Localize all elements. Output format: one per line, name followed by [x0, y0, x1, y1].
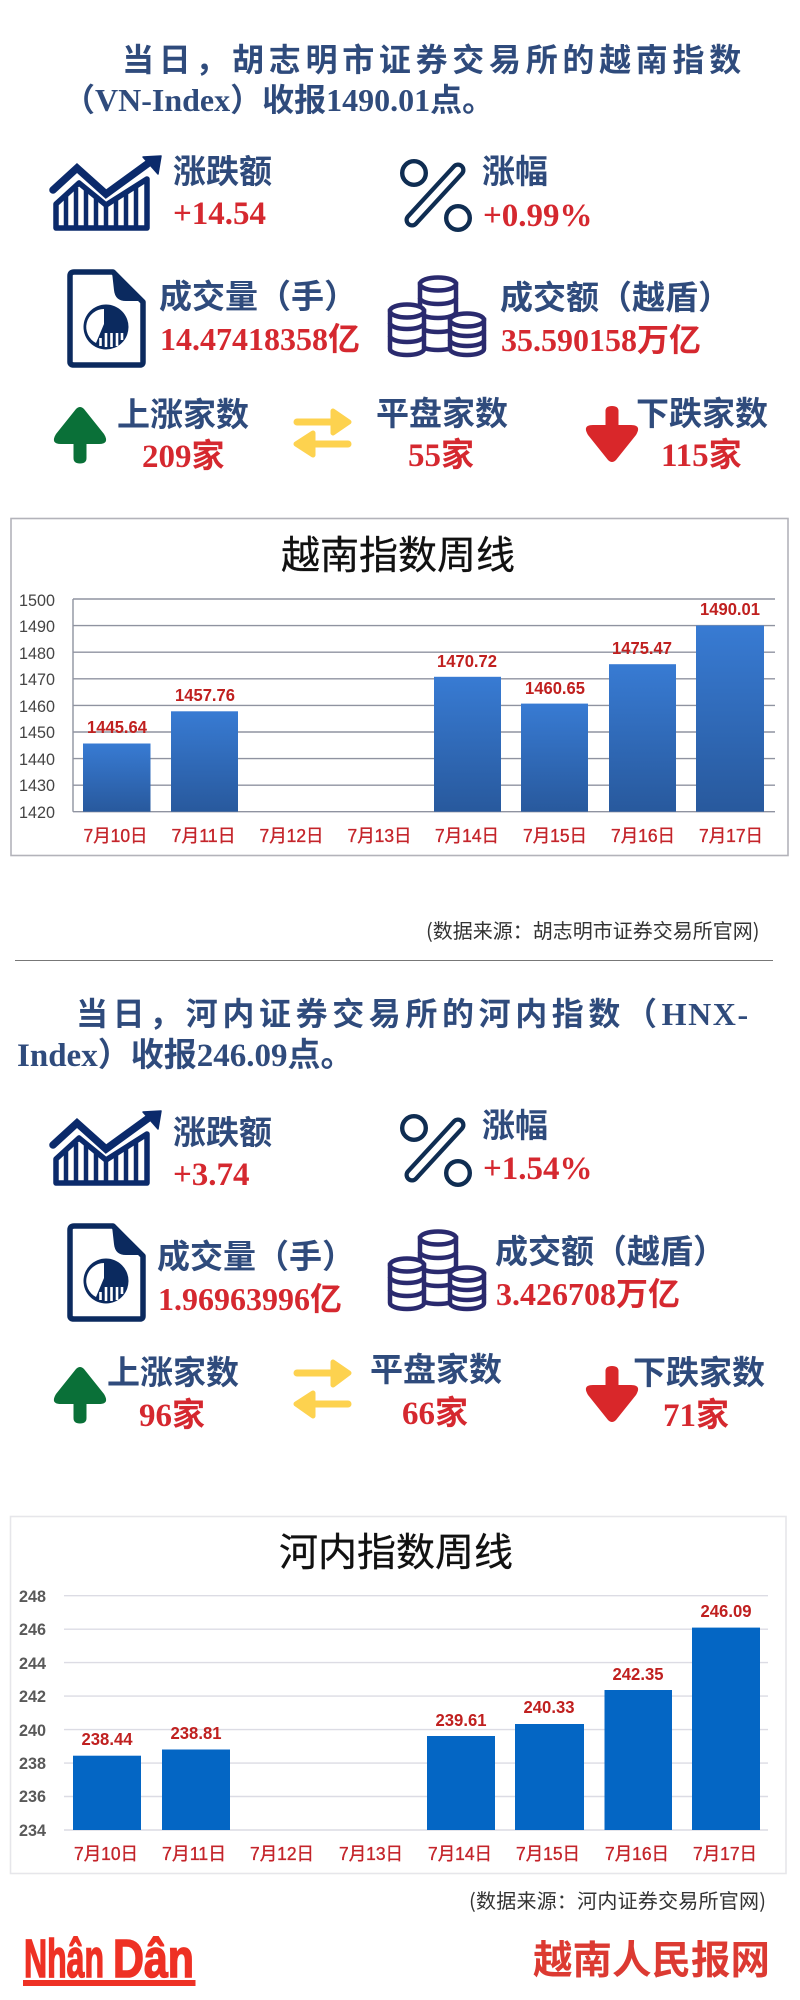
value: advancers: 209家: [142, 438, 224, 475]
data labels: 242.35: [612, 1664, 664, 1684]
x axis labels: 7月13日: [348, 826, 412, 846]
icon: document with pie chart: [70, 1226, 143, 1319]
y axis labels: 234: [19, 1821, 47, 1840]
label: change percent: 涨幅: [482, 1099, 548, 1147]
y axis labels: 244: [19, 1654, 47, 1673]
data labels: 238.81: [170, 1723, 222, 1743]
y axis labels: 1480: [19, 644, 55, 663]
icon: percent: [402, 161, 470, 230]
icon: up arrow: [54, 407, 106, 464]
heading: HNX-Index close, line 2: Index）收报246.09点。: [17, 1037, 353, 1074]
value: change: +3.74: [173, 1157, 250, 1193]
value: change percent: +1.54%: [483, 1151, 593, 1187]
panel: VN-Index weekly bar chart: [11, 518, 788, 856]
icon: coin stacks: [390, 278, 484, 355]
logo: Nhan Dan: Dân: [113, 1929, 194, 1989]
data labels: 246.09: [700, 1601, 752, 1621]
x axis labels: 7月10日: [84, 826, 148, 846]
icon: trend chart: [53, 156, 161, 228]
value: advancers: 96家: [139, 1397, 205, 1434]
label: advancers: 上涨家数: [107, 1346, 239, 1394]
icon: trend chart: [53, 1111, 161, 1183]
x axis labels: 7月16日: [605, 1844, 669, 1864]
label: change percent: 涨幅: [482, 145, 548, 193]
data labels: 1457.76: [175, 685, 235, 705]
x axis labels: 7月17日: [699, 826, 763, 846]
chart title: 河内指数周线: [279, 1522, 513, 1578]
value: unchanged: 66家: [402, 1395, 468, 1432]
data labels: 1460.65: [525, 678, 585, 698]
y axis labels: 1420: [19, 803, 55, 822]
label: turnover: 成交额（越盾）: [500, 271, 731, 319]
y axis labels: 242: [19, 1687, 46, 1706]
value: volume: 14.47418358亿: [160, 321, 360, 357]
icon: unchanged double arrows: [296, 411, 349, 455]
value: unchanged: 55家: [408, 437, 474, 474]
value: decliners: 71家: [663, 1397, 729, 1434]
source note: VN-Index: (数据来源：胡志明市证券交易所官网): [426, 915, 760, 944]
heading: VN-Index close, line 2: （VN-Index）收报1490.01点。: [63, 82, 494, 118]
label: change: 涨跌额: [173, 1106, 272, 1154]
x axis labels: 7月12日: [250, 1844, 314, 1864]
section: VN-Index summary: [53, 42, 768, 475]
x axis labels: 7月11日: [162, 1844, 226, 1864]
y axis labels: [19, 591, 55, 822]
x axis labels: 7月11日: [172, 826, 236, 846]
value: turnover: 35.590158万亿: [501, 322, 701, 358]
panel: HNX-Index weekly bar chart: [10, 1516, 786, 1874]
data labels: [87, 599, 760, 737]
label: decliners: 下跌家数: [636, 387, 768, 435]
label: unchanged: 平盘家数: [370, 1343, 502, 1391]
data labels: [82, 1601, 752, 1749]
value: change: +14.54: [173, 196, 266, 232]
y axis labels: 1430: [19, 776, 55, 795]
heading: HNX-Index close, line 1: 当日，河内证券交易所的河内指数（HNX-: [76, 996, 750, 1032]
data labels: 1490.01: [700, 599, 760, 619]
bars: [73, 1628, 760, 1830]
y axis labels: 1450: [19, 723, 55, 742]
data labels: 238.44: [82, 1729, 133, 1749]
y axis labels: 1440: [19, 750, 55, 769]
x axis labels: 7月15日: [523, 826, 587, 846]
y axis labels: 236: [19, 1787, 46, 1806]
value: change percent: +0.99%: [483, 198, 593, 234]
bars: [83, 626, 764, 812]
label: decliners: 下跌家数: [633, 1346, 765, 1394]
icon: down arrow: [586, 406, 638, 462]
icon: percent: [402, 1116, 470, 1185]
y axis labels: 1470: [19, 670, 55, 689]
data labels: 1470.72: [437, 651, 497, 671]
x axis labels: 7月15日: [516, 1844, 580, 1864]
y axis labels: 248: [19, 1587, 46, 1606]
y axis labels: 238: [19, 1754, 46, 1773]
x axis labels: 7月13日: [339, 1844, 403, 1864]
data labels: 1445.64: [87, 717, 147, 737]
label: turnover: 成交额（越盾）: [495, 1225, 726, 1273]
label: volume: 成交量（手）: [159, 270, 357, 318]
chart title: 越南指数周线: [281, 525, 515, 581]
x axis labels: 7月16日: [611, 826, 675, 846]
value: volume: 1.96963996亿: [158, 1281, 342, 1317]
icon: unchanged double arrows: [296, 1362, 349, 1416]
value: turnover: 3.426708万亿: [496, 1276, 680, 1312]
brand name: 越南人民报网: [533, 1929, 770, 1986]
logo: Nhan Dan: Nhân: [24, 1929, 104, 1989]
icon: document with pie chart: [70, 272, 143, 365]
x axis labels: 7月10日: [74, 1844, 138, 1864]
icon: down arrow: [586, 1366, 638, 1422]
x axis labels: 7月14日: [428, 1844, 492, 1864]
data labels: 240.33: [524, 1697, 575, 1717]
y axis labels: 1490: [19, 617, 55, 636]
heading: VN-Index close, line 1: 当日，胡志明市证券交易所的越南指数: [122, 42, 746, 78]
data labels: 1475.47: [612, 638, 672, 658]
value: decliners: 115家: [661, 437, 742, 474]
y axis labels: 1500: [19, 591, 55, 610]
y axis labels: [19, 1587, 47, 1840]
x axis labels: 7月17日: [693, 1844, 757, 1864]
icon: coin stacks: [390, 1232, 484, 1309]
label: volume: 成交量（手）: [157, 1230, 355, 1278]
label: change: 涨跌额: [173, 145, 272, 193]
source note: HNX: (数据来源：河内证券交易所官网): [469, 1885, 766, 1914]
label: advancers: 上涨家数: [117, 388, 249, 436]
section: HNX-Index summary: [17, 996, 765, 1434]
x axis labels: 7月14日: [435, 826, 499, 846]
icon: up arrow: [54, 1367, 106, 1424]
x axis labels: [74, 1844, 757, 1864]
label: unchanged: 平盘家数: [376, 387, 508, 435]
y axis labels: 240: [19, 1721, 46, 1740]
data labels: 239.61: [436, 1710, 487, 1730]
x axis labels: [84, 826, 763, 846]
y axis labels: 246: [19, 1620, 46, 1639]
x axis labels: 7月12日: [260, 826, 324, 846]
y axis labels: 1460: [19, 697, 55, 716]
